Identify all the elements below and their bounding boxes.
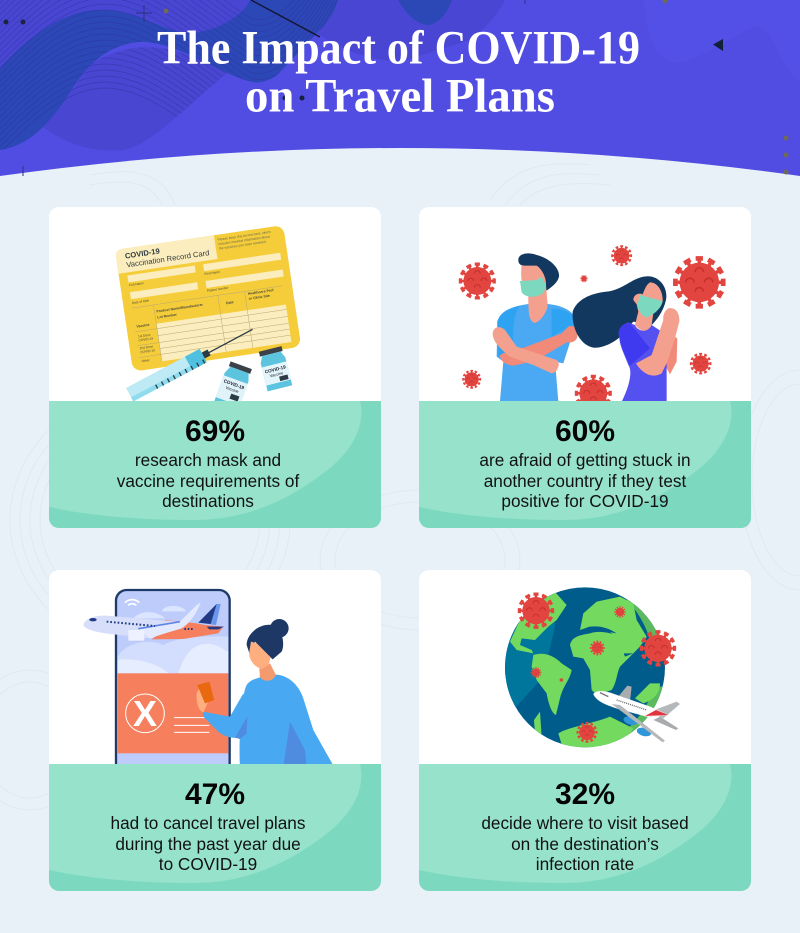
description: another country if they test [484,471,686,491]
statistic: 47% [185,778,245,811]
description [117,450,299,511]
illustration: vaccination record card: Lot Number [157,313,178,319]
illustration: vaccination record card [115,225,301,372]
illustration: vaccination record card: includes medical information about [218,235,270,246]
illustration: vaccination record card: Vaccination Record Card [126,248,210,269]
illustration: vaccination record card: Patient number [207,286,230,293]
background contour lines [0,164,800,810]
illustration: vaccine vial right: COVID-19 [264,364,287,374]
illustration: vaccination record card: Product Name/Manufacturer [156,303,204,314]
stat band [419,764,751,891]
description: vaccine requirements of [117,471,299,491]
title [157,22,640,122]
illustration: vaccine vial left [214,361,253,411]
panel: fear of getting stuck [419,207,751,528]
stat band [49,764,381,891]
description: during the past year due [115,834,301,854]
description [111,813,305,874]
illustration: phone with cancelled booking [116,590,230,777]
statistic: 69% [185,415,245,448]
illustration: masked man [493,253,577,401]
illustration: vaccination record card: COVID-19 [138,336,154,342]
description [479,450,691,511]
panel: vaccine research [49,207,381,528]
illustration: globe [505,587,675,750]
panel: infection rate [419,570,751,891]
illustration: woman holding card [197,619,334,767]
description: are afraid of getting stuck in [479,450,691,470]
illustration: vaccination record card: COVID-19 [124,246,160,261]
illustration: vaccination record card: the vaccines you have received. [219,240,267,251]
statistic: 32% [555,778,615,811]
title: on Travel Plans [245,70,555,122]
illustration: masked woman [573,276,679,401]
title: The Impact of COVID-19 [157,22,640,74]
description: decide where to visit based [481,813,689,833]
illustration: vaccine vial left: COVID-19 [223,378,245,391]
illustration: phone with cancelled booking: X [133,693,157,734]
header banner [0,0,800,176]
description: on the destination’s [511,834,659,854]
description: infection rate [536,854,634,874]
illustration: vaccination record card: Healthcare Prof [248,288,275,296]
panel: cancelled plans [49,570,381,891]
illustration: vaccination record card: Date of birth [132,299,150,305]
illustration: airliner [593,686,680,742]
description: positive for COVID-19 [501,491,669,511]
description [481,813,689,874]
illustration: vaccination record card: 1st Dose [138,333,151,339]
illustration: vaccination record card: Vaccine [136,323,150,329]
illustration: vaccination record card: Other [141,358,151,363]
illustration: virus particles [460,246,723,410]
illustration: airplane [83,603,224,641]
illustration: syringe [126,323,256,401]
statistic: 60% [555,415,615,448]
illustration: vaccination record card: Please keep this record card, which [217,230,271,242]
illustration: vaccination record card: COVID-19 [140,348,155,354]
illustration: vaccine vial left: Vaccine [225,385,240,394]
description: to COVID-19 [159,854,257,874]
illustration: vaccine vial right: Vaccine [269,370,285,378]
illustration: vaccine vial right [258,346,292,391]
description: destinations [162,491,254,511]
illustration: vaccination record card: 2nd Dose [139,344,154,350]
stat band [49,401,381,528]
illustration: vaccination record card: Full Name [129,281,144,287]
illustration: vaccination record card: Date [226,300,234,305]
illustration: vaccination record card: or Clinic Site [248,294,270,301]
description: research mask and [135,450,281,470]
description: had to cancel travel plans [111,813,305,833]
stat band [419,401,751,528]
illustration: vaccination record card: First Name [204,270,220,276]
